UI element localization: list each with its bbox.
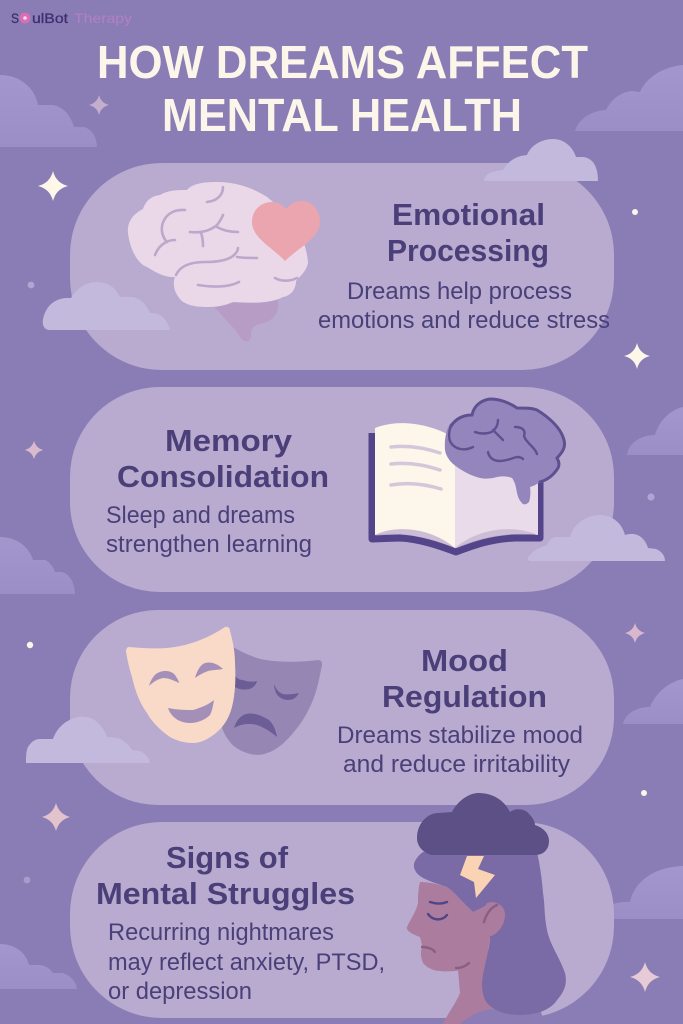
heading: Regulation [382,679,547,714]
body text: Dreams stabilize mood [337,722,583,749]
sparkle [25,441,43,459]
panel: emotional processing [43,139,614,370]
panel: memory consolidation [70,387,665,592]
hair [414,852,566,1015]
icon: brain with heart [128,182,320,341]
cloud on panel top [484,139,598,181]
icon: book with brain [372,399,565,552]
title [97,36,588,141]
dots [24,209,655,883]
background cloud: right middle [627,407,683,455]
panel: mood regulation [26,610,614,805]
title: HOW DREAMS AFFECT [97,36,588,88]
body text [106,502,312,558]
sparkle [38,171,68,201]
watermark logo: Therapy [74,10,132,26]
heading: Emotional [392,197,545,232]
body text: Recurring nightmares [108,919,334,946]
panel: signs of mental struggles [70,793,614,1024]
ear [485,902,505,936]
icon: sad mask [222,647,322,755]
heading: Processing [387,233,549,268]
sparkle [89,95,109,115]
cloud on panel left [26,717,150,763]
background cloud: top left [0,75,97,147]
background cloud: left bottom [0,944,77,989]
body text: Dreams help process [347,278,572,305]
body text [108,919,385,1005]
cloud on panel left [43,282,170,330]
heading: Mood [421,643,508,678]
storm cloud [417,793,549,855]
body text: or depression [108,978,252,1005]
heading: Memory [165,423,293,458]
background cloud: right bottom [598,866,683,919]
heading: Signs of [166,840,289,875]
sparkle [624,343,650,369]
body text: emotions and reduce stress [318,307,610,334]
sparkle [42,803,70,831]
body text: may reflect anxiety, PTSD, [108,949,385,976]
background cloud: left middle [0,537,75,594]
icon: happy mask [126,627,235,743]
background cloud: top right [575,65,683,131]
lightning bolt [460,856,495,898]
heading [382,643,547,714]
cloud on panel right [528,515,665,561]
body text [337,722,583,778]
heading [117,423,329,494]
neck and shoulder [443,950,494,1024]
title: MENTAL HEALTH [162,89,522,141]
sparkle [625,623,645,643]
watermark logo: S [11,10,19,26]
background cloud: right lower [623,679,683,724]
watermark logo: ulBot [32,10,68,26]
sparkle [630,962,660,992]
watermark logo [11,10,132,26]
shirt [460,1009,545,1024]
icon: woman with storm cloud [407,793,566,1024]
body text: and reduce irritability [343,751,570,778]
body text [318,278,610,334]
heading: Consolidation [117,459,329,494]
heading [387,197,549,268]
body text: strengthen learning [106,531,312,558]
face [407,882,490,971]
heading: Mental Struggles [96,876,355,911]
heading [96,840,355,911]
body text: Sleep and dreams [106,502,295,529]
facial features [422,902,469,968]
